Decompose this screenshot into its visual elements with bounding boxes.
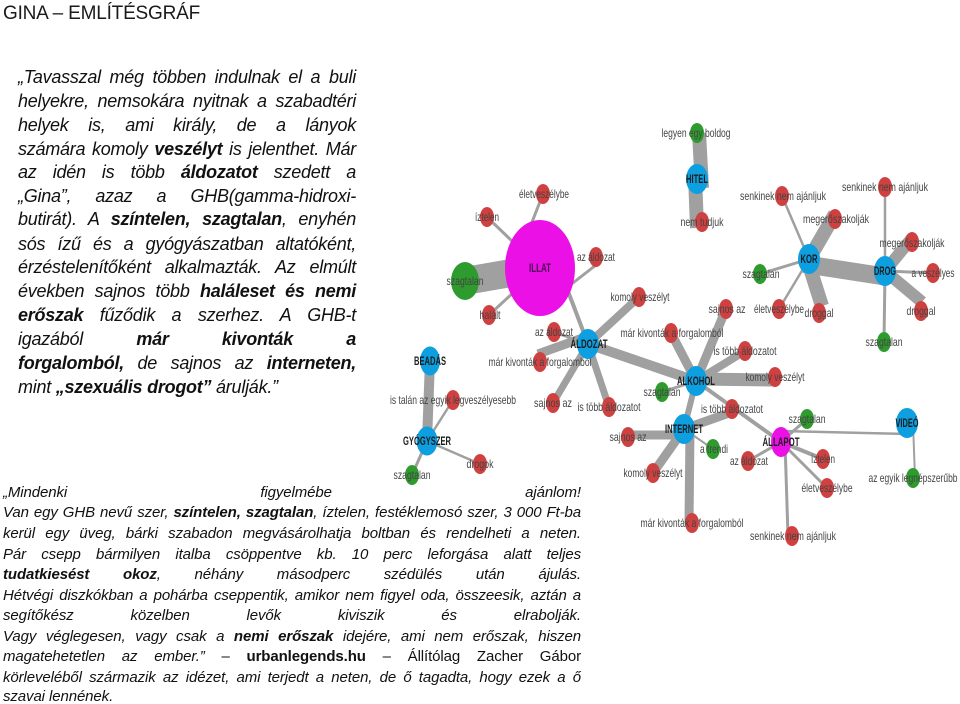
- node: ILLAT: [505, 220, 575, 316]
- node: ÁLLAPOT: ÁLLAPOT: [762, 434, 800, 449]
- node: az áldozat: az áldozat: [577, 250, 615, 264]
- node: droggal 2: droggal: [906, 304, 936, 318]
- text: körleveléből származik az idézet, ami terjedt a neten, de ő tagadta, hogy ezek a ő: [3, 669, 581, 686]
- node: droggal: droggal: [804, 306, 834, 320]
- node: senkinek nem ajánljuk: senkinek nem ajánljuk: [740, 189, 827, 203]
- text: magatehetetlen az ember.” – urbanlegends.hu – Állítólag Zacher Gábor: [3, 648, 581, 665]
- node: ALKOHOL: [677, 366, 715, 396]
- node: is több áldozatot: is több áldozatot: [578, 400, 641, 414]
- text: igazából már kivonták a: [18, 329, 356, 349]
- text block: urban legend: [2, 484, 582, 704]
- text block: quote: [17, 67, 357, 397]
- node: nem tudjuk: [680, 212, 724, 232]
- node: ÁLLAPOT: [762, 427, 800, 457]
- node: életveszélybe 3: [802, 478, 853, 498]
- title: GINA – EMLÍTÉSGRÁF: [3, 3, 200, 24]
- node: is több áldozatot: [578, 397, 641, 417]
- text: helyekre, nemsokára nyitnak a szabadtéri: [18, 91, 356, 111]
- node: életveszélybe: [519, 184, 569, 204]
- node: is talán az egyik legveszélyesebb: is talán az egyik legveszélyesebb: [390, 393, 516, 407]
- node: szagtalan 4: [866, 332, 902, 352]
- text: Hétvégi diszkókban a pohárba cseppentik, amikor nem figyel oda, összeesik, aztán a: [3, 587, 581, 604]
- node: szagtalan 2: [394, 465, 430, 485]
- node: sajnos az: [534, 393, 572, 413]
- node: íztelen: [475, 207, 499, 227]
- node: az áldozat 3: az áldozat: [730, 454, 768, 468]
- node: komoly veszélyt 3: [624, 463, 683, 483]
- text: „Mindenki figyelmébe ajánlom!: [3, 484, 581, 501]
- text: Vagy véglegesen, vagy csak a nemi erőszak idejére, ami nem erőszak, hiszen: [3, 628, 581, 645]
- node: már kivonták a forgalomból 3: [640, 513, 744, 533]
- node: életveszélybe 2: életveszélybe: [754, 302, 804, 316]
- node: íztelen: íztelen: [475, 210, 499, 224]
- node: legyen egy boldog: legyen egy boldog: [662, 126, 730, 140]
- node: szagtalan 4: szagtalan: [866, 335, 902, 349]
- node: VIDEÓ: VIDEÓ: [896, 415, 918, 430]
- node: szagtalan 5: [644, 382, 680, 402]
- node: sajnos az: sajnos az: [534, 396, 572, 410]
- node: szagtalan 5: szagtalan: [644, 385, 680, 399]
- node: szagtalan 6: szagtalan: [788, 412, 826, 426]
- node: komoly veszélyt 3: komoly veszélyt: [624, 466, 683, 480]
- node: már kivonták a forgalomból: [488, 352, 592, 372]
- node: senkinek nem ajánljuk 3: senkinek nem ajánljuk: [750, 529, 837, 543]
- node: ÁLDOZAT: ÁLDOZAT: [570, 336, 608, 351]
- node: is több áldozatot 3: [701, 399, 763, 419]
- node: a veszélyes: [912, 263, 954, 283]
- node: sajnos az 2: sajnos az: [708, 302, 746, 316]
- node: legyen egy boldog: [662, 123, 730, 143]
- text: butirát). A színtelen, szagtalan, enyhén: [18, 209, 356, 229]
- node: sajnos az 3: sajnos az: [610, 430, 646, 444]
- node: senkinek nem ajánljuk 2: [842, 177, 929, 197]
- node: már kivonták a forgalomból: már kivonták a forgalomból: [488, 355, 592, 369]
- text: mint „szexuális drogot” árulják.”: [18, 377, 278, 397]
- node: INTERNET: [665, 414, 703, 444]
- text: sós ízű és a gyógyászatban altatóként,: [18, 234, 356, 254]
- node: INTERNET: INTERNET: [665, 422, 703, 436]
- node: HITEL: [686, 164, 708, 194]
- node: senkinek nem ajánljuk 2: senkinek nem ajánljuk: [842, 180, 929, 194]
- text: érzéstelenítőként alkalmazták. Az elmúlt: [18, 257, 356, 277]
- node: íztelen 2: íztelen: [811, 452, 835, 466]
- node: halált: halált: [480, 308, 501, 322]
- text: kerül egy üveg, bárki szabadon megvásárolhatja boltban és rendelheti a neten.: [3, 525, 581, 542]
- node: az egyik legnépszerűbb: [868, 468, 958, 488]
- node: KOR: [798, 244, 820, 274]
- node: életveszélybe 3: életveszélybe: [802, 481, 853, 495]
- node: a trendi: [700, 439, 728, 459]
- node: VIDEÓ: [896, 408, 918, 438]
- node: senkinek nem ajánljuk 3: [750, 526, 837, 546]
- text: erőszak fűződik a szerhez. A GHB-t: [18, 305, 356, 325]
- text: segítőkész közelben levők kiviszik és elrabolják.: [3, 607, 581, 624]
- node: nem tudjuk: nem tudjuk: [680, 215, 724, 229]
- node: megerőszakolják 2: [880, 232, 945, 252]
- text: Pár csepp bármilyen italba csöppentve kb. 10 perc leforgása alatt teljes: [3, 546, 581, 563]
- node: az áldozat 2: [535, 322, 573, 342]
- node: drogok: [466, 454, 494, 474]
- node: is több áldozatot 2: is több áldozatot: [714, 344, 777, 358]
- node: már kivonták a forgalomból 2: már kivonták a forgalomból: [620, 326, 724, 340]
- node: BEADÁS: [414, 346, 446, 376]
- node: halált: [480, 305, 501, 325]
- text: „Tavasszal még többen indulnak el a buli: [18, 67, 356, 87]
- node: életveszélybe 2: [754, 299, 804, 319]
- node: a trendi: a trendi: [700, 442, 728, 456]
- node: is több áldozatot 2: [714, 341, 777, 361]
- node: már kivonták a forgalomból 3: már kivonták a forgalomból: [640, 516, 744, 530]
- node: szagtalan: [446, 262, 484, 300]
- node: komoly veszélyt: komoly veszélyt: [610, 290, 670, 304]
- node: drogok: drogok: [466, 457, 494, 471]
- node: sajnos az 2: [708, 299, 746, 319]
- node: DROG: [874, 256, 896, 286]
- node: GYÓGYSZER: [403, 426, 451, 456]
- text: az idén is több áldozatot szedett a: [18, 162, 356, 182]
- node: az áldozat: [577, 247, 615, 267]
- node: megerőszakolják: megerőszakolják: [803, 212, 870, 226]
- text: „Gina”, azaz a GHB(gamma-hidroxi-: [18, 186, 356, 206]
- node: is talán az egyik legveszélyesebb: [390, 390, 516, 410]
- text: Van egy GHB nevű szer, színtelen, szagtalan, íztelen, festéklemosó szer, 3 000 Ft-ba: [3, 504, 581, 521]
- node: az áldozat 3: [730, 451, 768, 471]
- node: szagtalan 3: szagtalan: [742, 267, 780, 281]
- node: ILLAT: ILLAT: [529, 261, 551, 275]
- node: BEADÁS: BEADÁS: [414, 353, 446, 368]
- node: is több áldozatot 3: is több áldozatot: [701, 402, 763, 416]
- node: komoly veszélyt 2: komoly veszélyt: [746, 370, 805, 384]
- node: DROG: DROG: [874, 264, 896, 278]
- node: GYÓGYSZER: GYÓGYSZER: [403, 433, 451, 448]
- node: szagtalan: szagtalan: [446, 274, 484, 288]
- node: droggal 2: [906, 301, 936, 321]
- node: megerőszakolják: [803, 209, 870, 229]
- node: íztelen 2: [811, 449, 835, 469]
- node: HITEL: HITEL: [686, 172, 708, 186]
- node: ÁLDOZAT: [570, 329, 608, 359]
- node: senkinek nem ajánljuk: [740, 186, 827, 206]
- node: életveszélybe: életveszélybe: [519, 187, 569, 201]
- node: sajnos az 3: [610, 427, 646, 447]
- node: már kivonták a forgalomból 2: [620, 323, 724, 343]
- node: szagtalan 2: szagtalan: [394, 468, 430, 482]
- node: szagtalan 6: [788, 409, 826, 429]
- node: komoly veszélyt 2: [746, 367, 805, 387]
- node: az áldozat 2: az áldozat: [535, 325, 573, 339]
- text: forgalomból, de sajnos az interneten,: [18, 353, 356, 373]
- text: években sajnos több haláleset és nemi: [18, 281, 356, 301]
- node: ALKOHOL: ALKOHOL: [677, 374, 715, 388]
- text: számára komoly veszélyt is jelenthet. Már: [18, 139, 356, 159]
- node: szagtalan 3: [742, 264, 780, 284]
- node: KOR: KOR: [800, 252, 818, 266]
- text: helyek is, ami király, de a lányok: [18, 115, 356, 135]
- text: tudatkiesést okoz, néhány másodperc szédülés után ájulás.: [3, 566, 581, 583]
- node: droggal: [804, 303, 834, 323]
- graph edges: [412, 133, 933, 536]
- node: komoly veszélyt: [610, 287, 670, 307]
